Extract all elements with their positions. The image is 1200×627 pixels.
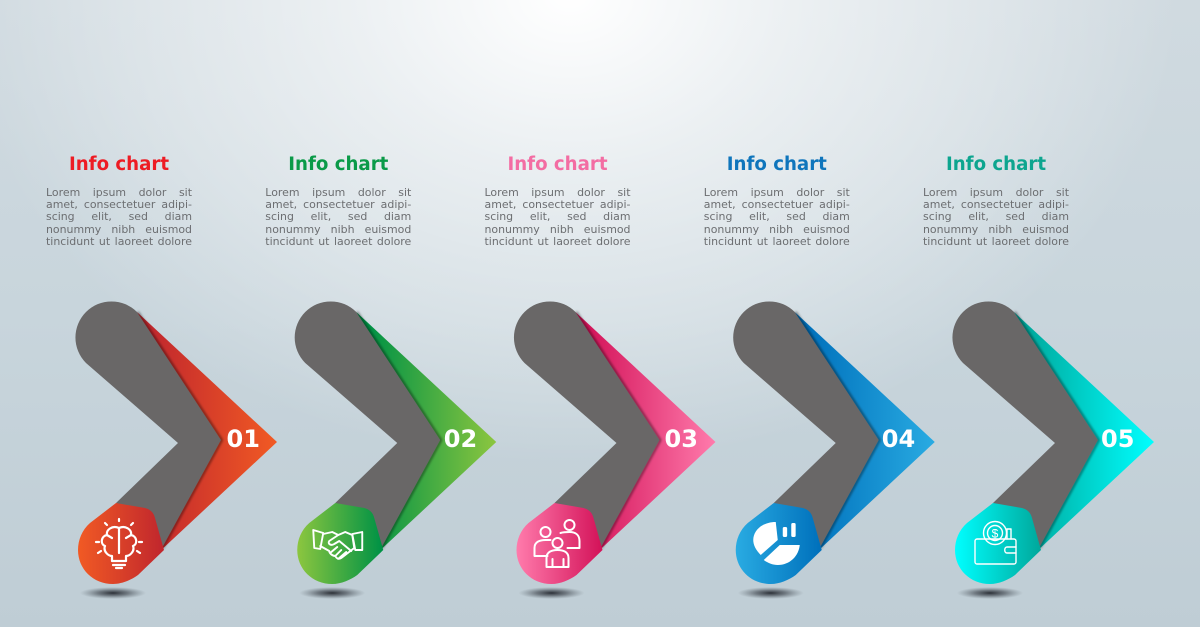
text block 4: scing elit, sed diam bbox=[704, 210, 850, 223]
icon: brain light bulb bbox=[96, 519, 142, 568]
text block 5: Lorem ipsum dolor sit bbox=[923, 186, 1069, 199]
text block 5: nonummy nibh euismod bbox=[923, 223, 1069, 236]
heading 1: Info chart bbox=[69, 154, 169, 174]
text block 1: scing elit, sed diam bbox=[46, 210, 192, 223]
text block 5 bbox=[923, 186, 1069, 248]
text block 1: Lorem ipsum dolor sit bbox=[46, 186, 192, 199]
text block 3: Lorem ipsum dolor sit bbox=[484, 186, 630, 199]
number 05: 05 bbox=[1101, 425, 1134, 453]
text block 1 bbox=[46, 186, 192, 248]
chevron 02 bbox=[295, 301, 496, 599]
text block 2: amet, consectetuer adipi- bbox=[265, 198, 411, 211]
heading 5: Info chart bbox=[946, 154, 1046, 174]
icon: people group bbox=[534, 520, 580, 567]
chevron 05 bbox=[952, 301, 1154, 599]
text block 4: nonummy nibh euismod bbox=[704, 223, 850, 236]
text block 1: tincidunt ut laoreet dolore bbox=[46, 235, 192, 248]
number 02: 02 bbox=[444, 425, 477, 453]
chevron 04 bbox=[733, 301, 935, 599]
heading 4: Info chart bbox=[727, 154, 827, 174]
text block 3: nonummy nibh euismod bbox=[484, 223, 630, 236]
text block 3: scing elit, sed diam bbox=[484, 210, 630, 223]
icon: wallet with coin: $ bbox=[992, 526, 999, 540]
heading 3: Info chart bbox=[507, 154, 608, 174]
number 01: 01 bbox=[226, 425, 260, 453]
icon: handshake bbox=[313, 530, 362, 559]
text block 2: Lorem ipsum dolor sit bbox=[265, 186, 411, 199]
chevron 01 bbox=[75, 301, 277, 599]
text block 4: tincidunt ut laoreet dolore bbox=[704, 235, 850, 248]
text block 4: amet, consectetuer adipi- bbox=[704, 198, 850, 211]
text block 2: scing elit, sed diam bbox=[265, 210, 411, 223]
icon: pie chart bbox=[753, 522, 800, 565]
icon: wallet with coin bbox=[975, 522, 1016, 564]
text block 1: amet, consectetuer adipi- bbox=[46, 198, 192, 211]
text block 2: nonummy nibh euismod bbox=[265, 223, 411, 236]
chevron 03 bbox=[514, 301, 716, 599]
text block 4: Lorem ipsum dolor sit bbox=[704, 186, 850, 199]
number 04: 04 bbox=[882, 425, 915, 453]
text block 5: amet, consectetuer adipi- bbox=[923, 198, 1069, 211]
text block 3: amet, consectetuer adipi- bbox=[484, 198, 630, 211]
text block 3 bbox=[484, 186, 630, 248]
text block 3: tincidunt ut laoreet dolore bbox=[484, 235, 630, 248]
text block 5: tincidunt ut laoreet dolore bbox=[923, 235, 1069, 248]
text block 2 bbox=[265, 186, 412, 248]
text block 5: scing elit, sed diam bbox=[923, 210, 1069, 223]
heading 2: Info chart bbox=[288, 154, 388, 174]
text block 4 bbox=[704, 186, 850, 248]
number 03: 03 bbox=[664, 425, 698, 453]
text block 2: tincidunt ut laoreet dolore bbox=[265, 235, 411, 248]
text block 1: nonummy nibh euismod bbox=[46, 223, 192, 236]
